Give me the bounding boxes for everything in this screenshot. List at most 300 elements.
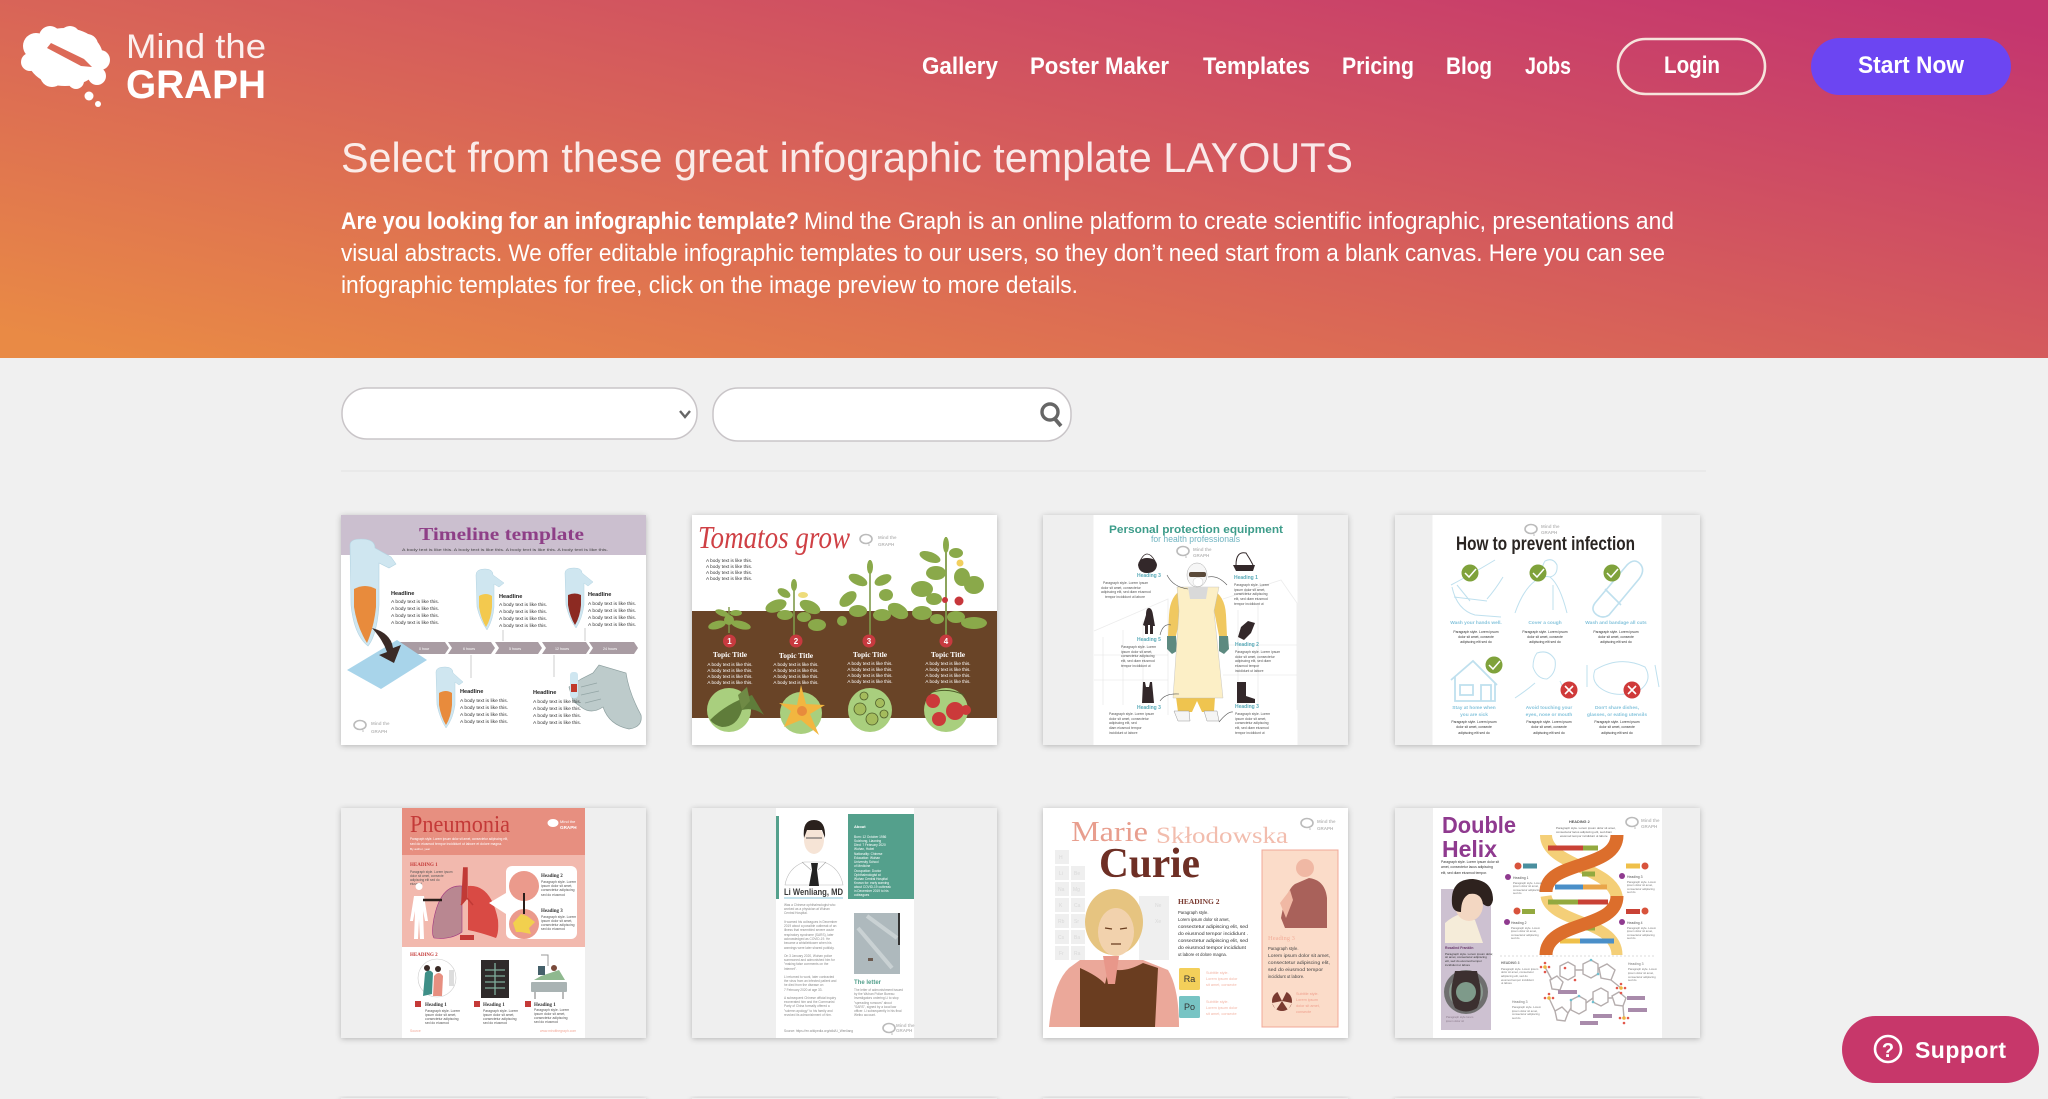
title: Pneumonia bbox=[410, 812, 510, 838]
lower text blocks: dolor sit amet, consectetur bbox=[1501, 970, 1534, 974]
navigation: Blog bbox=[1446, 53, 1492, 80]
lower text blocks: consectetur adipiscing bbox=[1512, 1012, 1540, 1016]
building background lines bbox=[1094, 580, 1297, 715]
row 2 labels: Avoid touching your bbox=[1526, 705, 1572, 711]
card: double helix: amet, consectetur lacus adipiscing bbox=[1441, 865, 1493, 869]
row 1 labels: adipiscing elit sed do bbox=[1460, 640, 1492, 644]
side annotations: consectetur adipiscing bbox=[1627, 933, 1655, 937]
lower text blocks: Heading 3 bbox=[1512, 1000, 1528, 1004]
row 1 labels: Wash your hands well. bbox=[1450, 620, 1502, 626]
logo bbox=[1525, 524, 1560, 536]
DNA helix bbox=[1546, 835, 1617, 955]
annotations left: Heading 3 bbox=[1137, 573, 1161, 579]
peach side panel: incididunt ut labore. bbox=[1268, 974, 1304, 979]
periodic table background: Ba bbox=[1074, 935, 1080, 941]
black arrow bbox=[372, 628, 401, 663]
annotations right: ipsum dolor sit amet, bbox=[1234, 588, 1265, 592]
row 2 labels: Don't share dishes, bbox=[1595, 705, 1640, 711]
annotations left: tempor incididunt ut labore bbox=[1105, 595, 1145, 599]
card: tomatoes grow: A body text is like this. bbox=[706, 564, 752, 569]
letter caption: "SARS", signed by a local law bbox=[854, 1005, 897, 1009]
biography text: A subsequent Chinese official inquiry bbox=[784, 996, 836, 1000]
row 1 labels: Paragraph style. Lorem ipsum bbox=[1453, 630, 1499, 634]
row 1 labels: adipiscing elit sed do bbox=[1600, 640, 1632, 644]
biography text: respiratory syndrome (SARS), later bbox=[784, 933, 835, 937]
annotations left: Heading 5 bbox=[1137, 637, 1161, 643]
annotations left: diam eiusmod tempor bbox=[1109, 726, 1142, 730]
annotations right: tempor incididunt ut bbox=[1235, 731, 1265, 735]
periodic table background: Rb bbox=[1058, 919, 1065, 925]
annotations right: ipsum dolor sit amet, bbox=[1235, 717, 1266, 721]
biography text: Party of China formally offered a bbox=[784, 1004, 830, 1008]
annotations right: Heading 3 bbox=[1235, 704, 1259, 710]
bandage illustration bbox=[1593, 561, 1643, 617]
annotations left: incididunt ut labore bbox=[1109, 731, 1138, 735]
periodic table background: Xe bbox=[1155, 919, 1161, 925]
teal bio box: in December 2019 to his bbox=[854, 889, 889, 893]
topic labels: A body text is like this. bbox=[773, 662, 819, 667]
biography text: he died from the disease on bbox=[784, 983, 824, 987]
logo: GRAPH bbox=[1193, 553, 1209, 558]
topic labels: A body text is like this. bbox=[847, 679, 893, 684]
card: tomatoes grow: A body text is like this. bbox=[706, 558, 752, 563]
periodic table background: Sr bbox=[1074, 919, 1079, 925]
side annotations: consectetur adipiscing bbox=[1511, 933, 1539, 937]
molecule diagram bbox=[1540, 959, 1647, 1025]
white callout box: sed do eiusmod bbox=[541, 893, 565, 897]
lower text blocks bbox=[1501, 961, 1658, 1020]
numbered captions: Source bbox=[410, 1029, 421, 1033]
navigation: Poster Maker bbox=[1030, 53, 1169, 80]
text blocks: Headline bbox=[391, 591, 414, 597]
navigation: Pricing bbox=[1342, 53, 1414, 80]
text blocks: Headline bbox=[533, 690, 556, 696]
logo: Mind the bbox=[896, 1023, 915, 1028]
letter caption bbox=[854, 980, 903, 1017]
card: tomatoes grow: A body text is like this. bbox=[706, 570, 752, 575]
lower text blocks: ipsum dolor sit amet, bbox=[1628, 971, 1654, 975]
Rosalind Franklin panel: Rosalind Franklin bbox=[1445, 946, 1473, 950]
logo text: GRAPH: GRAPH bbox=[126, 63, 266, 107]
face illustration bbox=[1515, 652, 1573, 698]
periodic table background: K bbox=[1059, 903, 1063, 909]
logo bbox=[354, 720, 390, 734]
text blocks: A body text is like this. bbox=[499, 609, 547, 615]
Rosalind Franklin panel: ipsum dolor sit bbox=[1446, 1019, 1464, 1023]
annotations right: elit, sed diam eiusmod bbox=[1235, 726, 1269, 730]
biography text: acknowledged as COVID-19. He bbox=[784, 937, 830, 941]
annotations right: consectetur adipiscing bbox=[1234, 592, 1268, 596]
header gradient band bbox=[0, 0, 2048, 358]
annotations left: adipiscing elit, sed diam eiusmod bbox=[1101, 590, 1151, 594]
element Ra: Lorem ipsum dolor bbox=[1206, 977, 1238, 981]
Rosalind Franklin panel: incididunt ut labore bbox=[1445, 963, 1471, 967]
login button bbox=[1618, 39, 1765, 94]
biography text: 7 February 2020 at age 33. bbox=[784, 988, 823, 992]
plant 3 bbox=[836, 560, 911, 637]
gloved hand bbox=[569, 665, 641, 729]
biography text: It warned his colleagues in December bbox=[784, 920, 838, 924]
hospital bed bbox=[531, 955, 567, 999]
peach side panel: consectetur adipiscing elit, bbox=[1268, 960, 1330, 965]
side annotations: ipsum dolor sit amet, bbox=[1513, 884, 1539, 888]
numbered captions: ipsum dolor sit amet, bbox=[425, 1013, 456, 1017]
plant 2 bbox=[764, 579, 826, 637]
annotations right: dolor sit amet, consectetur bbox=[1235, 655, 1276, 659]
numbered captions: consectetur adipiscing bbox=[425, 1017, 459, 1021]
card: pneumonia: Paragraph style. Lorem ipsum bbox=[410, 870, 453, 874]
biography text: Internet". bbox=[784, 967, 797, 971]
row 2 labels: dolor sit amet, consecte bbox=[1456, 725, 1492, 729]
Rosalind Franklin panel: Paragraph style. Lorem ipsum dolor, bbox=[1445, 952, 1493, 956]
x-ray bbox=[481, 960, 509, 998]
teal bio box: Nationality: Chinese bbox=[854, 852, 883, 856]
title: Curie bbox=[1099, 841, 1200, 887]
topic labels: Topic Title bbox=[853, 650, 888, 659]
logo bbox=[1626, 818, 1660, 829]
card: pneumonia bbox=[341, 808, 646, 1038]
title: Personal protection equipment bbox=[1109, 524, 1283, 536]
numbered captions: Paragraph style. Lorem bbox=[425, 1009, 460, 1013]
letter caption: The letter of admonishment issued bbox=[854, 988, 903, 992]
side annotations: sed do bbox=[1627, 890, 1636, 894]
periodic table background: H bbox=[1059, 855, 1063, 861]
heading: Select from these great infographic template LAYOUTS bbox=[341, 134, 1353, 181]
row 2 labels: you are sick bbox=[1460, 712, 1488, 718]
element Po: Po bbox=[1184, 1002, 1195, 1012]
logo: Mind the bbox=[560, 819, 576, 824]
heading and paragraph: HEADING 2 bbox=[1178, 897, 1220, 906]
row 2 labels: adipiscing elit sed do bbox=[1601, 731, 1633, 735]
card: personal protection equipment: for health professionals bbox=[1151, 534, 1240, 544]
title: Skłodowska bbox=[1156, 823, 1288, 848]
periodic table background: Ca bbox=[1074, 903, 1081, 909]
Rosalind Franklin panel: sit amet, consectetur adipiscing bbox=[1445, 955, 1487, 959]
row 1 labels: Cover a cough bbox=[1528, 620, 1562, 626]
teal bio box: Wuhan, Hubei bbox=[854, 847, 874, 851]
side annotations: Heading 2 bbox=[1511, 921, 1527, 925]
topic labels: Topic Title bbox=[713, 650, 748, 659]
card: pneumonia: eiusmod bbox=[410, 882, 422, 886]
row 1 labels: Paragraph style. Lorem ipsum bbox=[1593, 630, 1639, 634]
large orange tube bbox=[350, 539, 396, 646]
side annotations: Paragraph style. Lorem bbox=[1627, 880, 1657, 884]
periodic table background: Li bbox=[1059, 871, 1063, 877]
topic labels: A body text is like this. bbox=[773, 680, 819, 685]
card: timeline template: 5 hours bbox=[509, 647, 521, 651]
lower text blocks: Heading 3 bbox=[1628, 962, 1644, 966]
biography text: 2019 about a possible outbreak of an bbox=[784, 924, 837, 928]
card: timeline template: 24 hours bbox=[603, 647, 617, 651]
navigation: Gallery bbox=[922, 53, 999, 80]
letter caption: Investigators ordering Li to stop bbox=[854, 996, 899, 1000]
annotations left: tempor incididunt ut bbox=[1121, 664, 1151, 668]
periodic table background bbox=[1055, 850, 1169, 960]
letter caption: by the Wuhan Police Bureau bbox=[854, 992, 895, 996]
navigation bbox=[922, 53, 1571, 80]
logo: GRAPH bbox=[560, 825, 577, 830]
element Po: Subtitle style. bbox=[1206, 1000, 1229, 1004]
card: timeline template: A body text is like this. A body text is like this. A body text is like this. A body text is like this. bbox=[402, 547, 608, 552]
lower text blocks: sed do bbox=[1628, 978, 1637, 982]
biography text: worked as a physician at Wuhan bbox=[784, 907, 830, 911]
numbered captions: consectetur adipiscing bbox=[483, 1017, 517, 1021]
side annotations: Heading 4 bbox=[1627, 921, 1643, 925]
heading and paragraph bbox=[1178, 897, 1249, 957]
numbered captions: consectetur adipiscing bbox=[534, 1016, 568, 1020]
side annotations: ipsum dolor sit amet, bbox=[1511, 929, 1537, 933]
row 2 labels: Paragraph style. Lorem ipsum bbox=[1594, 720, 1640, 724]
plate illustration bbox=[1587, 662, 1659, 694]
peach side panel: Subtitle style. bbox=[1296, 992, 1319, 996]
row 2 labels: dolor sit amet, consecte bbox=[1599, 725, 1635, 729]
card: tomatoes grow bbox=[692, 515, 997, 745]
periodic table background: Cs bbox=[1058, 935, 1065, 941]
intro paragraph: Are you looking for an infographic template? bbox=[341, 208, 799, 235]
topic labels: A body text is like this. bbox=[707, 668, 753, 673]
letter caption: Weibo account. bbox=[854, 1013, 876, 1017]
heading and paragraph: consectetur adipiscing elit, sed bbox=[1178, 924, 1249, 929]
letter photo bbox=[854, 913, 900, 974]
figure in protective suit bbox=[1160, 563, 1233, 722]
annotations left: elit, sed diam eiusmod bbox=[1121, 659, 1155, 663]
text blocks: A body text is like this. bbox=[460, 719, 508, 725]
house illustration bbox=[1451, 661, 1497, 701]
logo: GRAPH bbox=[1641, 824, 1657, 829]
heading 1: HEADING 1 bbox=[410, 863, 438, 868]
annotations left: dolor sit amet, consectetur bbox=[1109, 717, 1150, 721]
check icons row 1 bbox=[1462, 564, 1620, 674]
red tube bbox=[565, 568, 593, 628]
plant 1 bbox=[707, 607, 752, 633]
lower text blocks: consectetur adipiscing bbox=[1628, 975, 1656, 979]
periodic table background: Ne bbox=[1155, 903, 1162, 909]
white callout box: Paragraph style. Lorem bbox=[541, 915, 576, 919]
top heading: Paragraph style. Lorem ipsum dolor sit amet, bbox=[1556, 826, 1616, 830]
annotations right: adipiscing elit, sed diam bbox=[1235, 659, 1271, 663]
logo: Mind the bbox=[1641, 818, 1660, 823]
peach side panel: Heading 3 bbox=[1268, 935, 1295, 942]
teal bio box bbox=[848, 814, 914, 899]
teal bio box: about COVID-19 outbreak bbox=[854, 885, 891, 889]
biography text: On 3 January 2020, Wuhan police bbox=[784, 954, 832, 958]
text blocks: A body text is like this. bbox=[391, 606, 439, 612]
topic labels: A body text is like this. bbox=[707, 674, 753, 679]
lungs bbox=[423, 868, 498, 940]
teal bio box: Known for: early warning bbox=[854, 881, 889, 885]
numbered captions: Heading 1 bbox=[534, 1003, 556, 1008]
top heading: eiusmod tempor incididunt ut labore bbox=[1560, 834, 1608, 838]
topic labels: A body text is like this. bbox=[847, 667, 893, 672]
title bbox=[1071, 817, 1288, 887]
topic labels: A body text is like this. bbox=[925, 679, 971, 684]
lower text blocks: Paragraph style. Lorem bbox=[1628, 967, 1658, 971]
letter caption: "spreading rumours" about bbox=[854, 1001, 892, 1005]
doctor portrait bbox=[785, 820, 843, 886]
peach side panel: Lorem ipsum dolor sit amet, bbox=[1268, 953, 1330, 958]
logo: Mind the bbox=[1317, 819, 1336, 824]
annotations right: Heading 1 bbox=[1234, 575, 1258, 581]
lower text blocks: adipiscing elit, sed do bbox=[1501, 974, 1528, 978]
card: double helix: Paragraph style. Lorem ipsum dolor sit bbox=[1441, 860, 1499, 864]
biography text: summoned and admonished him for bbox=[784, 958, 836, 962]
navigation: Templates bbox=[1203, 53, 1310, 80]
card: timeline template: 0 hour bbox=[419, 647, 430, 651]
element Ra: Ra bbox=[1184, 974, 1195, 984]
teal bio box: Education: Wuhan bbox=[854, 856, 880, 860]
text blocks: A body text is like this. bbox=[391, 599, 439, 605]
text blocks: A body text is like this. bbox=[533, 706, 581, 712]
peach side panel: Lorem ipsum bbox=[1296, 998, 1318, 1002]
card: double helix bbox=[1395, 808, 1700, 1038]
topic labels bbox=[707, 650, 971, 685]
lower text blocks: eiusmod tempor incididunt bbox=[1501, 978, 1534, 982]
title: Helix bbox=[1442, 836, 1497, 862]
row 1 labels: dolor sit amet, consecte bbox=[1598, 635, 1634, 639]
card: pneumonia: Paragraph style. Lorem ipsum dolor sit amet, consectetur adipiscing elit, bbox=[410, 837, 508, 841]
lower text blocks: Paragraph style. Lorem ipsum bbox=[1501, 967, 1539, 971]
top heading: consectetur lacus adipiscing elit, sed diam bbox=[1556, 830, 1613, 834]
logo bbox=[21, 26, 266, 107]
teal bio box: University School bbox=[854, 860, 879, 864]
orange tube lower bbox=[436, 667, 463, 728]
card: pneumonia: sed do eiusmod tempor incididunt ut labore et dolore magna. bbox=[410, 842, 502, 846]
lower text blocks: ut labore bbox=[1501, 981, 1512, 985]
numbered captions: ipsum dolor sit amet, bbox=[483, 1013, 514, 1017]
step numbers: 4 bbox=[944, 637, 949, 646]
yellow tube bbox=[476, 569, 504, 630]
topic labels: A body text is like this. bbox=[925, 673, 971, 678]
row 1 labels: dolor sit amet, consecte bbox=[1527, 635, 1563, 639]
row 2 labels: Stay at home when bbox=[1452, 705, 1496, 711]
peach side panel bbox=[1262, 850, 1338, 1027]
topic labels: A body text is like this. bbox=[773, 668, 819, 673]
text blocks: A body text is like this. bbox=[391, 613, 439, 619]
annotations left: consectetur adipiscing bbox=[1121, 654, 1155, 658]
biography text: "making false comments on the bbox=[784, 962, 829, 966]
heading and paragraph: Lorem ipsum dolor sit amet, bbox=[1178, 917, 1230, 922]
row 2 labels: adipiscing elit sed do bbox=[1533, 731, 1565, 735]
login button: Login bbox=[1664, 52, 1720, 79]
topic labels: A body text is like this. bbox=[925, 667, 971, 672]
side annotations: consectetur adipiscing bbox=[1627, 887, 1655, 891]
numbered captions: Paragraph style. Lorem bbox=[483, 1009, 518, 1013]
letter caption: officer. Li subsequently in his final bbox=[854, 1009, 902, 1013]
row 2 labels: dolor sit amet, consecte bbox=[1531, 725, 1567, 729]
row 2 labels: glasses, or eating utensils bbox=[1587, 712, 1647, 718]
annotations left: Heading 3 bbox=[1137, 705, 1161, 711]
numbered captions: sed do eiusmod bbox=[534, 1020, 558, 1024]
periodic table background: Mg bbox=[1073, 887, 1080, 893]
element Po: Lorem ipsum dolor bbox=[1206, 1006, 1238, 1010]
support button bbox=[1842, 1016, 2039, 1083]
Rosalind Franklin panel bbox=[1441, 879, 1493, 1030]
numbered captions: ipsum dolor sit amet, bbox=[534, 1012, 565, 1016]
icon: question mark bbox=[1875, 1036, 1901, 1062]
logo: GRAPH bbox=[1541, 530, 1557, 535]
teal bio box: Occupation: Doctor bbox=[854, 869, 882, 873]
top heading: HEADING 2 bbox=[1569, 820, 1590, 824]
text blocks: A body text is like this. bbox=[533, 713, 581, 719]
logo: GRAPH bbox=[371, 729, 387, 734]
annotations right: eiusmod tempor bbox=[1235, 664, 1260, 668]
logo bbox=[883, 1023, 915, 1035]
row 1 labels bbox=[1450, 620, 1647, 644]
text blocks: Headline bbox=[588, 592, 611, 598]
heading and paragraph: do eiusmod tempor incididunt . bbox=[1178, 931, 1248, 936]
white callout box: sed do eiusmod bbox=[541, 927, 565, 931]
annotations left: Paragraph style. Lorem bbox=[1121, 645, 1156, 649]
white callout box: ipsum dolor sit amet, bbox=[541, 884, 572, 888]
text blocks: A body text is like this. bbox=[460, 698, 508, 704]
title: Marie bbox=[1071, 817, 1148, 848]
annotations right: Paragraph style. Lorem bbox=[1234, 583, 1269, 587]
lower text blocks: ipsum dolor sit amet, bbox=[1512, 1009, 1538, 1013]
annotations right bbox=[1234, 575, 1280, 735]
side annotations: sed do bbox=[1513, 891, 1522, 895]
logo: GRAPH bbox=[878, 542, 894, 547]
topic labels: Topic Title bbox=[931, 650, 966, 659]
side annotations: Paragraph style. Lorem bbox=[1513, 881, 1543, 885]
numbered captions: Heading 1 bbox=[425, 1003, 447, 1008]
side annotations: sed do bbox=[1627, 936, 1636, 940]
letter caption: The letter bbox=[854, 980, 882, 986]
plant 4 bbox=[911, 537, 987, 637]
card: timeline template: 12 hours bbox=[555, 647, 569, 651]
annotations left: Paragraph style. Lorem ipsum bbox=[1109, 712, 1154, 716]
text blocks: A body text is like this. bbox=[588, 608, 636, 614]
heading and paragraph: consectetur adipiscing elit, sed bbox=[1178, 938, 1249, 943]
search input bbox=[713, 388, 1071, 441]
text blocks: Headline bbox=[460, 689, 483, 695]
biography text: "solemn apology" to his family and bbox=[784, 1009, 833, 1013]
third row card tops bbox=[341, 1098, 1700, 1099]
annotations right: Paragraph style. Lorem bbox=[1235, 712, 1270, 716]
logo: Mind the bbox=[878, 535, 897, 540]
step numbers: 1 bbox=[727, 637, 732, 646]
text blocks: A body text is like this. bbox=[460, 712, 508, 718]
topic labels: A body text is like this. bbox=[707, 680, 753, 685]
heading and paragraph: do eiusmod tempor incididunt bbox=[1178, 945, 1247, 950]
text blocks: A body text is like this. bbox=[460, 705, 508, 711]
category select bbox=[342, 388, 697, 439]
equipment icons bbox=[1138, 553, 1255, 703]
cross icons bbox=[1560, 682, 1640, 698]
topic labels: Topic Title bbox=[779, 651, 814, 660]
title: Tomatos grow bbox=[698, 519, 851, 555]
logo bbox=[1301, 818, 1336, 831]
numbered captions bbox=[410, 1001, 576, 1033]
biography text bbox=[784, 903, 853, 1033]
numbered captions: sed do eiusmod bbox=[425, 1021, 449, 1025]
lower text blocks: HEADING 3 bbox=[1501, 961, 1520, 965]
side annotations bbox=[1504, 862, 1657, 940]
text blocks: A body text is like this. bbox=[391, 620, 439, 626]
card: timeline template bbox=[341, 515, 646, 745]
element Ra: Subtitle style. bbox=[1206, 971, 1229, 975]
annotations right: tempor incididunt ut bbox=[1234, 602, 1264, 606]
numbered captions: Paragraph style. Lorem bbox=[534, 1008, 569, 1012]
teal bio box: of Medicine bbox=[854, 864, 871, 868]
logo bbox=[1177, 546, 1212, 558]
topic labels: A body text is like this. bbox=[773, 674, 819, 679]
title: Timeline template bbox=[419, 524, 584, 544]
side annotations: ipsum dolor sit amet, bbox=[1627, 883, 1653, 887]
text blocks: A body text is like this. bbox=[533, 699, 581, 705]
white callout box: Paragraph style. Lorem bbox=[541, 880, 576, 884]
annotations left: Paragraph style. Lorem ipsum bbox=[1103, 581, 1148, 585]
intro paragraph: visual abstracts. We offer editable infographic templates to our users, so they don’t need start from a blank canvas. Here you can see bbox=[341, 240, 1665, 267]
